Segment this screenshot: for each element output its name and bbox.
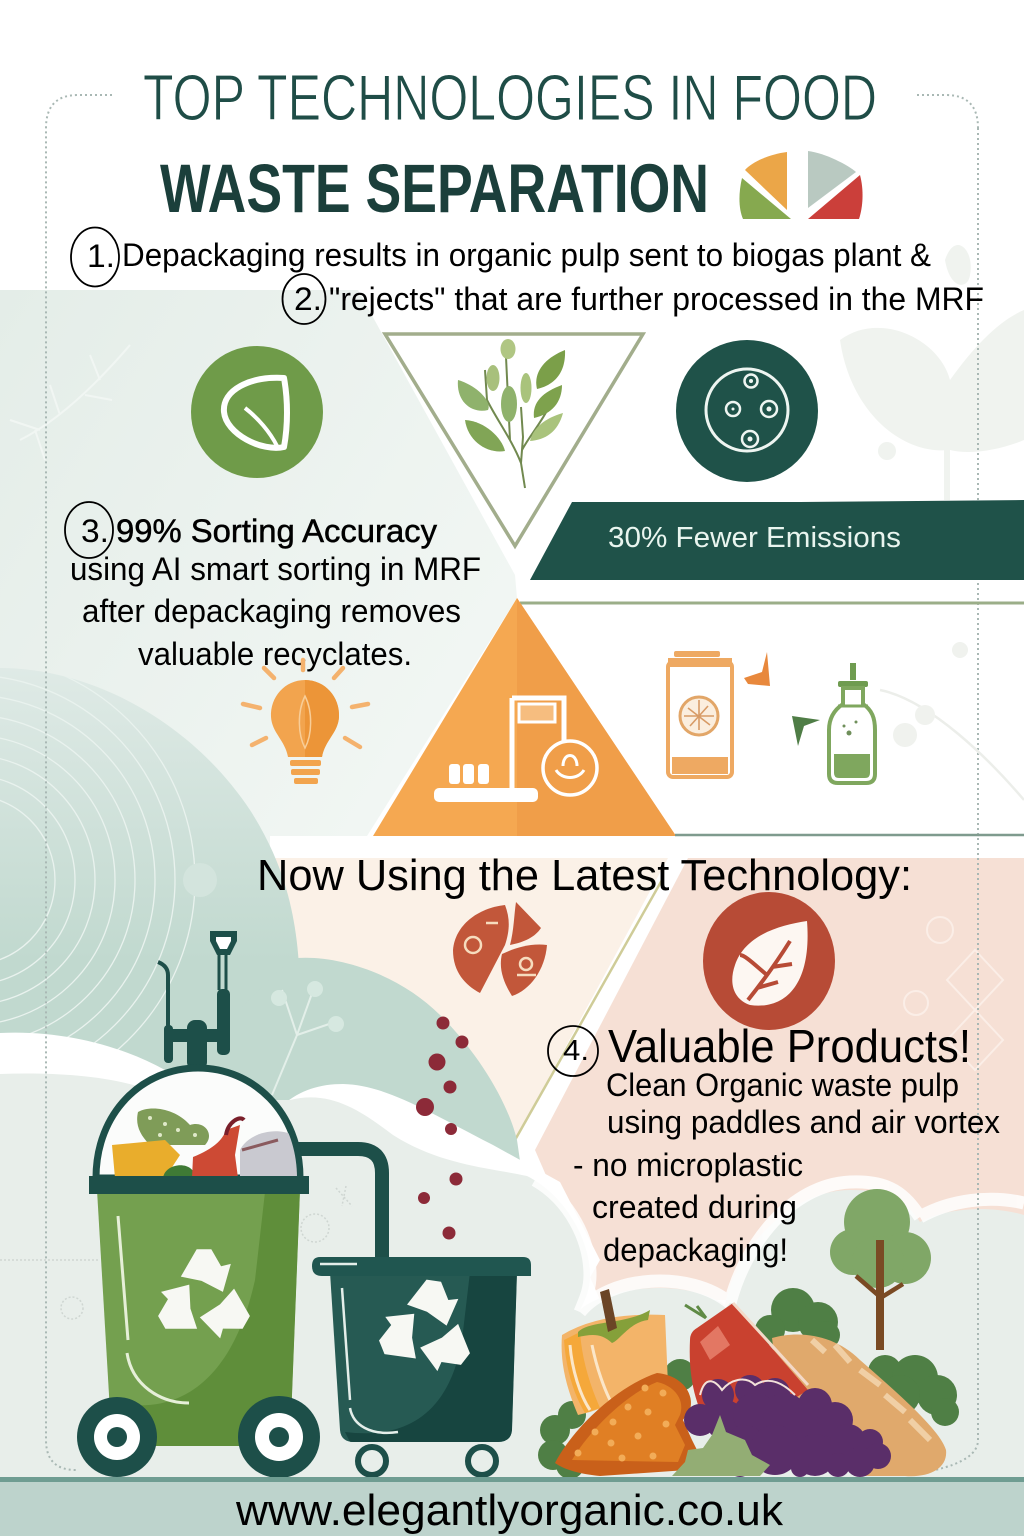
dome [96, 1068, 300, 1178]
footer website: www.elegantlyorganic.co.uk [235, 1486, 784, 1535]
icon: green leaf circle [191, 346, 323, 478]
faint sprig right [880, 642, 1024, 800]
icon: recycling symbol [365, 1273, 487, 1384]
banner: 30% fewer emissions: 30% Fewer Emissions [608, 522, 901, 554]
step 2 [282, 274, 984, 324]
background: pink panel [535, 858, 1024, 1300]
title line two: WASTE SEPARATION [160, 150, 709, 227]
step 4 [548, 1020, 1000, 1268]
icon: light bulb [243, 660, 368, 784]
step 4 text: depackaging! [603, 1232, 788, 1268]
bushes [538, 1288, 959, 1479]
background: lower left pale ground [0, 1074, 1024, 1480]
icon: recycling symbol [148, 1249, 258, 1346]
title [143, 61, 877, 227]
background: faint leaf top right [840, 245, 1024, 500]
green bin with dome [77, 931, 320, 1478]
background: big teal hill with concentric arcs [0, 668, 298, 1070]
lid bar [89, 1176, 309, 1194]
icon: machine [434, 698, 597, 802]
icon: tree [830, 1189, 931, 1350]
icon: pie chart [739, 151, 863, 219]
icon: sprig [458, 339, 565, 488]
step 3 text: valuable recyclates. [138, 636, 412, 672]
footer band [0, 1477, 1024, 1536]
number badge 2 [282, 274, 326, 324]
bin body [97, 1190, 300, 1446]
food pile [538, 1288, 959, 1479]
herbs [672, 1415, 770, 1476]
background: peach panel [262, 858, 668, 1140]
step 3 text: using AI smart sorting in MRF [70, 551, 481, 587]
step 3 heading: 99% Sorting Accuracy [116, 513, 437, 549]
dark bin body [330, 1272, 517, 1442]
grape highlights [700, 1380, 795, 1395]
bread [772, 1334, 946, 1476]
falling red dots [416, 1016, 468, 1240]
dark bin wheels [358, 1447, 496, 1475]
step 4 text [573, 1067, 1000, 1268]
number 4: 4. [563, 1035, 589, 1067]
background: lower left wave [0, 1033, 600, 1330]
step 4 text: using paddles and air vortex [607, 1104, 1000, 1140]
step 4 text: Clean Organic waste pulp [606, 1067, 959, 1103]
icon: dark circle with four symbols [676, 340, 818, 482]
background: second teal hill [200, 958, 540, 1300]
step 1 text: Depackaging results in organic pulp sent to biogas plant & [122, 237, 931, 273]
arrow: green [792, 716, 820, 746]
step 3 [65, 502, 481, 672]
number badge 1 [71, 228, 119, 286]
red can [690, 1303, 808, 1420]
number badge 3 [65, 502, 113, 558]
grapes [684, 1375, 891, 1477]
diagonal olive rule [515, 880, 662, 1140]
plant stalk on hill [271, 981, 344, 1095]
step 4 heading: Valuable Products! [608, 1020, 971, 1072]
banner: 30% fewer emissions [530, 500, 1024, 580]
rule under banner [520, 602, 1024, 604]
icon: jar [668, 651, 732, 777]
step 4 text: - no microplastic [573, 1147, 803, 1183]
latest technology heading: Now Using the Latest Technology: [257, 851, 912, 900]
background: pale green panel [0, 290, 517, 1100]
icon: red leaf circle [703, 892, 835, 1030]
bin wheels [77, 1396, 320, 1478]
background: faint sprig left [10, 345, 130, 460]
dark bin [312, 1257, 531, 1475]
carrot slice [555, 1373, 697, 1476]
icon: bottle [829, 663, 875, 783]
food in dome [112, 1108, 300, 1180]
number badge 4 [548, 1026, 598, 1076]
number 1: 1. [87, 238, 115, 274]
step 1 [71, 228, 931, 286]
step 2 text: "rejects" that are further processed in the MRF [329, 281, 984, 317]
pepper [562, 1315, 668, 1415]
bin fitting and handle [158, 931, 237, 1070]
number 3: 3. [81, 513, 109, 549]
icon: red segmented pie [453, 902, 547, 996]
step 3 text: after depackaging removes [82, 593, 461, 629]
decorative dotted marks [0, 1186, 352, 1319]
arrow: orange [744, 652, 770, 686]
background: pink panel decorations [904, 917, 1003, 1070]
step 3 text [70, 551, 481, 672]
number 2: 2. [294, 281, 322, 317]
inverted triangle with plant [385, 334, 643, 546]
rule under orange triangle [675, 834, 1024, 836]
orange triangle with machine [373, 598, 676, 836]
step 4 text: created during [592, 1189, 797, 1225]
pipe between bins [290, 1149, 382, 1262]
background: lower right white wave [535, 1180, 1024, 1312]
dark bin rim [312, 1257, 531, 1276]
